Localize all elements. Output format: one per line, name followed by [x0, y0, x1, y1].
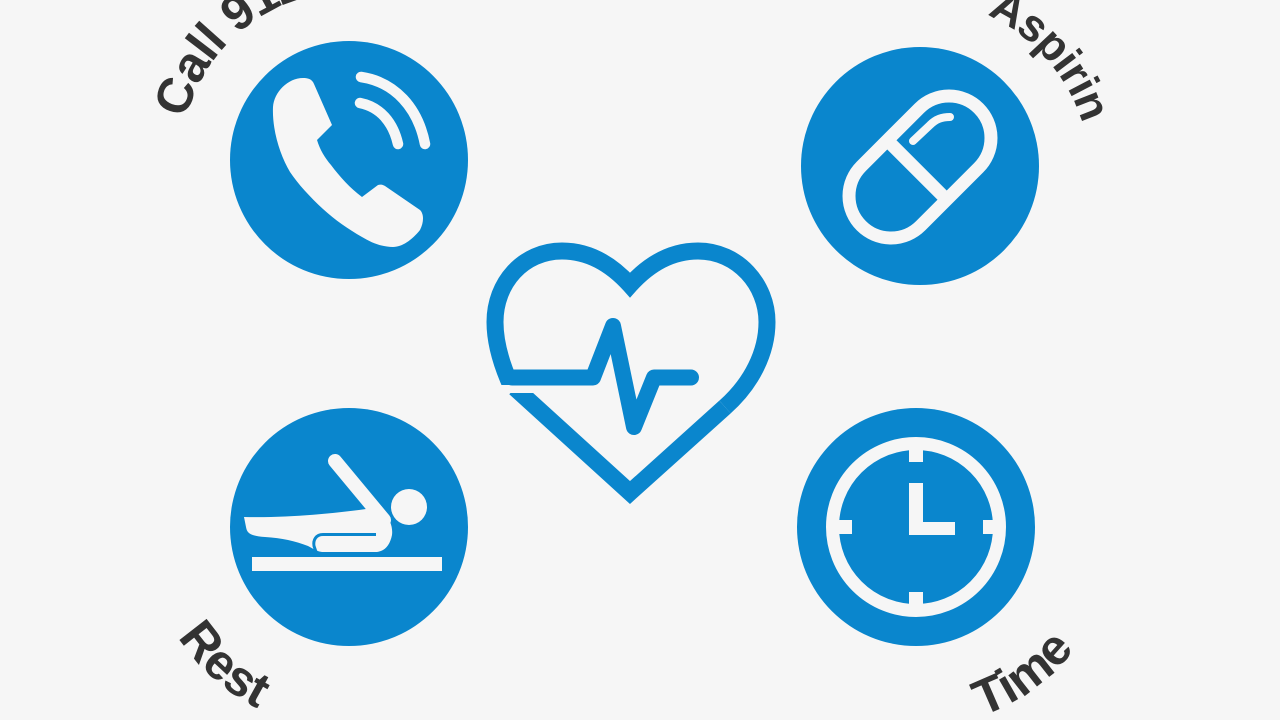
icon: raised arm — [335, 461, 384, 520]
clock ticks — [834, 445, 998, 609]
icon: heart with pulse line — [495, 251, 767, 492]
icon: body — [244, 509, 392, 552]
heart outline — [495, 251, 767, 407]
clock ring — [832, 444, 1000, 610]
icon: handset — [273, 78, 423, 247]
heart lower edges — [515, 388, 725, 492]
clock hands — [909, 483, 955, 535]
icon: signal waves — [360, 77, 425, 144]
icon: person resting in blue circle — [230, 408, 468, 646]
icon: telephone in blue circle — [230, 41, 468, 279]
icon: clock in blue circle — [797, 408, 1035, 646]
icon: mattress — [252, 557, 442, 571]
pulse line — [512, 326, 691, 427]
icon: capsule in blue circle — [801, 47, 1039, 285]
label: Rest: Rest — [180, 618, 270, 708]
icon: body arm line — [314, 534, 376, 552]
icon: capsule highlight — [913, 117, 950, 141]
icon: capsule divider — [887, 140, 947, 200]
icon: capsule outline — [832, 79, 1008, 255]
icon: head — [391, 489, 427, 525]
